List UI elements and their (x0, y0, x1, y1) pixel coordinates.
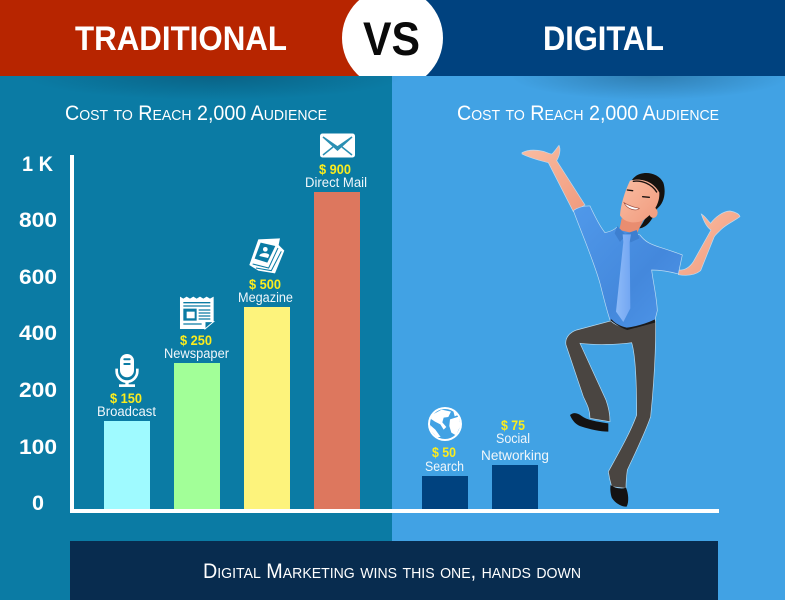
figure: upper body (522, 145, 740, 330)
bar: broadcast (104, 421, 150, 511)
label: direct mail: $ 900 (319, 162, 351, 177)
bar: search (422, 476, 468, 511)
heading: digital: DIGITAL (543, 20, 664, 58)
header: digital band (392, 0, 785, 76)
figure: eyebrows and eyes (627, 181, 657, 197)
label: search: $ 50 (432, 445, 456, 460)
figure: hair back (632, 173, 665, 228)
label: social networking: Networking (481, 448, 549, 463)
figure: ear (649, 207, 658, 218)
illustration: jumping businessman (522, 145, 740, 507)
header shadow (76, 76, 766, 96)
icon: magazine (249, 238, 284, 273)
banner: conclusion (70, 541, 718, 600)
icon: newspaper (180, 297, 214, 329)
label: search: Search (425, 459, 464, 474)
label: social networking: $ 75 (501, 418, 525, 433)
y axis labels: 200 (19, 379, 57, 402)
panel: traditional background (0, 76, 392, 600)
figure: blue shirt (573, 206, 682, 328)
label: broadcast: Broadcast (97, 404, 156, 419)
y axis labels (19, 153, 57, 515)
label: magazine: $ 500 (249, 277, 281, 292)
bar: social networking (492, 465, 538, 511)
y axis labels: 1 K (22, 153, 53, 176)
label: newspaper: $ 250 (180, 333, 212, 348)
chart axes (70, 155, 719, 513)
label: broadcast: $ 150 (110, 391, 142, 406)
badge: VS (342, 0, 443, 76)
label: social networking: Social (496, 431, 530, 446)
figure: collar (615, 226, 639, 242)
label: newspaper (164, 333, 229, 361)
icon: microphone (117, 354, 137, 387)
y axis labels: 600 (19, 266, 57, 289)
label: broadcast (97, 391, 156, 419)
figure: smile (624, 203, 639, 210)
subtitle: digital cost: Cost to Reach 2,000 Audience (457, 102, 719, 125)
icon: globe (428, 407, 462, 441)
y axis labels: 100 (19, 436, 57, 459)
figure: legs and shoes (566, 320, 656, 507)
bar: newspaper (174, 363, 220, 511)
y axis labels: 0 (32, 492, 44, 515)
y axis labels: 400 (19, 322, 57, 345)
bar: direct mail (314, 192, 360, 511)
label: search (425, 445, 464, 474)
figure: tie (616, 234, 631, 322)
figure: neck (619, 218, 643, 234)
label: social networking (481, 418, 549, 463)
header: traditional band (0, 0, 392, 76)
y axis labels: 800 (19, 209, 57, 232)
figure: raised arms (522, 145, 740, 275)
subtitle: traditional cost: Cost to Reach 2,000 Audience (65, 102, 327, 125)
banner: conclusion: Digital Marketing wins this one, hands down (203, 560, 581, 583)
panel: digital background (392, 76, 785, 600)
bar: magazine (244, 307, 290, 511)
label: direct mail: Direct Mail (305, 175, 367, 190)
label: magazine: Megazine (238, 290, 293, 305)
label: direct mail (305, 162, 367, 190)
heading: traditional: TRADITIONAL (75, 20, 287, 58)
badge: VS: VS (363, 12, 420, 65)
label: magazine (238, 277, 293, 305)
figure: face (620, 180, 659, 222)
label: newspaper: Newspaper (164, 346, 229, 361)
icon: envelope (320, 134, 355, 158)
figure: belt (610, 319, 655, 330)
